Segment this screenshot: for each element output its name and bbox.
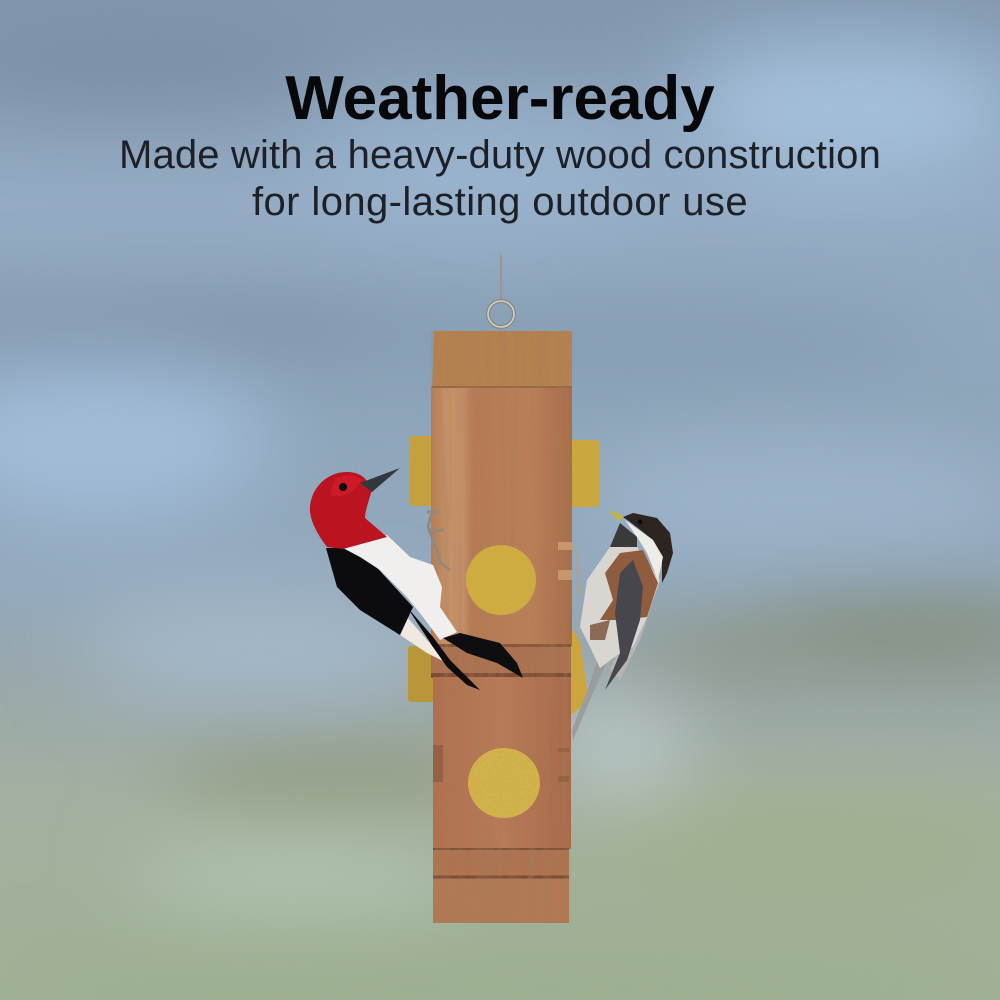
white breast xyxy=(343,535,457,640)
tail xyxy=(443,633,523,678)
black back xyxy=(326,548,413,635)
head xyxy=(310,472,387,549)
pale wing xyxy=(610,610,650,680)
tail xyxy=(572,650,612,740)
wooden feeder xyxy=(431,331,572,923)
cap xyxy=(623,513,673,583)
suet cakes behind feeder xyxy=(408,436,599,714)
subtitle: Made with a heavy-duty wood construction xyxy=(119,133,881,177)
bird: red-headed woodpecker xyxy=(310,468,523,690)
suet cake lower xyxy=(468,748,540,818)
white secondaries xyxy=(400,617,447,663)
body xyxy=(580,547,660,668)
foot xyxy=(427,512,450,570)
brown flank xyxy=(600,550,658,620)
beak xyxy=(360,468,400,492)
suet cake upper xyxy=(466,545,536,615)
subtitle xyxy=(119,133,881,224)
wing xyxy=(605,560,643,690)
wing tip xyxy=(407,607,480,690)
foot xyxy=(573,542,580,596)
hook and ring xyxy=(488,255,514,327)
subtitle: for long-lasting outdoor use xyxy=(252,180,748,224)
bib xyxy=(610,523,637,547)
title: Weather-ready xyxy=(285,64,715,133)
dovetail notches xyxy=(558,542,572,580)
bird: chickadee xyxy=(572,510,673,740)
cheek xyxy=(625,520,663,580)
beak xyxy=(607,510,623,522)
